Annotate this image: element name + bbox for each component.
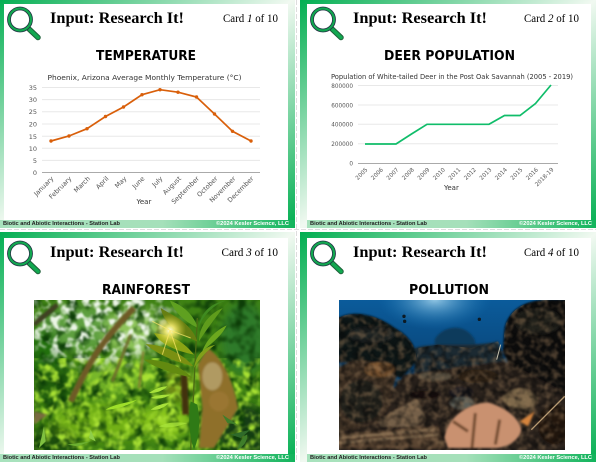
- x axis year labels: 2014: [494, 167, 509, 182]
- x axis month labels: April: [94, 175, 111, 191]
- card 4 gradient border: [300, 232, 596, 462]
- x axis month labels: December: [226, 175, 256, 204]
- card 1 topic title: TEMPERATURE: [96, 49, 196, 64]
- y axis labels: 15: [29, 133, 37, 141]
- card 4 magnifying glass icon: [312, 242, 341, 272]
- card 4 footer left text: Biotic and Abiotic Interactions - Station Lab: [310, 455, 427, 461]
- card 3 footer right text: ©2024 Kesler Science, LLC: [216, 454, 289, 461]
- y axis labels: 20: [29, 120, 37, 128]
- card 3 counter: Card 3 of 10: [222, 247, 278, 259]
- x axis year labels: 2018-19: [534, 167, 556, 188]
- card 4: pollution: [300, 232, 596, 462]
- temperature markers: [49, 88, 253, 143]
- x axis title: Year: [443, 184, 459, 192]
- y axis labels: 0: [349, 162, 353, 168]
- y axis labels: 30: [29, 96, 37, 104]
- card 2: deer population: [300, 0, 596, 228]
- x axis title: Year: [136, 198, 151, 206]
- y axis labels: 10: [29, 145, 37, 153]
- x axis month labels: May: [113, 175, 129, 190]
- card 1: temperature: [0, 0, 295, 228]
- x axis year labels: 2016: [525, 167, 540, 182]
- card 1 heading: Input: Research It!: [50, 10, 184, 27]
- x axis year labels: 2009: [417, 167, 432, 182]
- card 4 footer bar: [307, 454, 596, 462]
- card 1 white panel: [4, 4, 288, 220]
- x axis year labels: 2015: [510, 167, 525, 182]
- y axis labels: 400000: [331, 122, 353, 128]
- x axis year labels: 2013: [479, 167, 494, 182]
- x axis month labels: March: [72, 175, 92, 194]
- y axis labels: 35: [29, 84, 37, 92]
- x axis year labels: 2005: [355, 167, 370, 182]
- card 1 footer right text: ©2024 Kesler Science, LLC: [216, 220, 289, 227]
- x axis month labels: June: [130, 175, 146, 191]
- card 2 magnifying glass icon: [312, 8, 341, 38]
- card 1 footer bar: [0, 220, 295, 228]
- card 4 topic title: POLLUTION: [409, 283, 489, 298]
- card 1 footer left text: Biotic and Abiotic Interactions - Station Lab: [3, 221, 120, 227]
- card 3 magnifying glass icon: [9, 242, 38, 272]
- card 2 counter: Card 2 of 10: [524, 13, 579, 25]
- card 4 heading: Input: Research It!: [353, 244, 487, 261]
- y axis labels: 600000: [331, 104, 353, 110]
- photo: ocean floor covered in debris: [339, 300, 565, 450]
- x axis month labels: January: [32, 175, 56, 199]
- card 4 white panel: [307, 238, 591, 454]
- x axis month labels: August: [161, 174, 183, 197]
- x axis month labels: November: [208, 175, 238, 204]
- chart title: Population of White-tailed Deer in the Post Oak Savannah (2005 - 2019): [331, 73, 573, 81]
- line chart: deer population: [331, 73, 573, 192]
- y axis labels: 200000: [331, 142, 353, 148]
- card 1 gradient border: [0, 0, 295, 228]
- card 3 topic title: RAINFOREST: [102, 283, 190, 298]
- card 2 gradient border: [300, 0, 596, 228]
- temperature line: [51, 90, 251, 141]
- card 3: rainforest: [0, 232, 295, 462]
- y axis labels: [331, 84, 353, 168]
- x axis year labels: 2011: [448, 167, 463, 182]
- card 4 counter: Card 4 of 10: [524, 247, 579, 259]
- deer population line: [365, 85, 551, 144]
- card 3 gradient border: [0, 232, 295, 462]
- y axis labels: 25: [29, 108, 37, 116]
- x axis month labels: October: [195, 175, 220, 199]
- chart title: Phoenix, Arizona Average Monthly Temperature (°C): [48, 74, 242, 82]
- y axis labels: 800000: [331, 84, 353, 90]
- card 4 footer right text: ©2024 Kesler Science, LLC: [519, 454, 592, 461]
- card 1 magnifying glass icon: [9, 8, 38, 38]
- card 2 heading: Input: Research It!: [353, 10, 487, 27]
- card 2 footer right text: ©2024 Kesler Science, LLC: [519, 220, 592, 227]
- x axis month labels: September: [170, 175, 201, 206]
- x axis month labels: February: [47, 175, 74, 201]
- card 2 footer bar: [307, 220, 596, 228]
- line chart: Phoenix temperature: [29, 74, 260, 206]
- card 3 footer bar: [0, 454, 295, 462]
- x axis month labels: July: [150, 175, 165, 189]
- x axis year labels: 2012: [463, 167, 478, 182]
- card 3 white panel: [4, 238, 288, 454]
- card 2 topic title: DEER POPULATION: [384, 49, 515, 64]
- x axis year labels: 2007: [386, 167, 401, 182]
- card 1 counter: Card 1 of 10: [223, 13, 278, 25]
- photo: rainforest canopy with sunlit leaves: [34, 300, 260, 450]
- y axis labels: 0: [33, 169, 37, 177]
- x axis month labels: [32, 174, 256, 206]
- x axis year labels: 2010: [432, 167, 447, 182]
- x axis year labels: 2008: [401, 167, 416, 182]
- card 3 footer left text: Biotic and Abiotic Interactions - Station Lab: [3, 455, 120, 461]
- x axis year labels: 2006: [370, 167, 385, 182]
- y axis labels: 5: [33, 157, 37, 165]
- card 2 footer left text: Biotic and Abiotic Interactions - Station Lab: [310, 221, 427, 227]
- y axis labels: [29, 84, 37, 177]
- x axis year labels: [355, 167, 556, 188]
- card 2 white panel: [307, 4, 591, 220]
- card 3 heading: Input: Research It!: [50, 244, 184, 261]
